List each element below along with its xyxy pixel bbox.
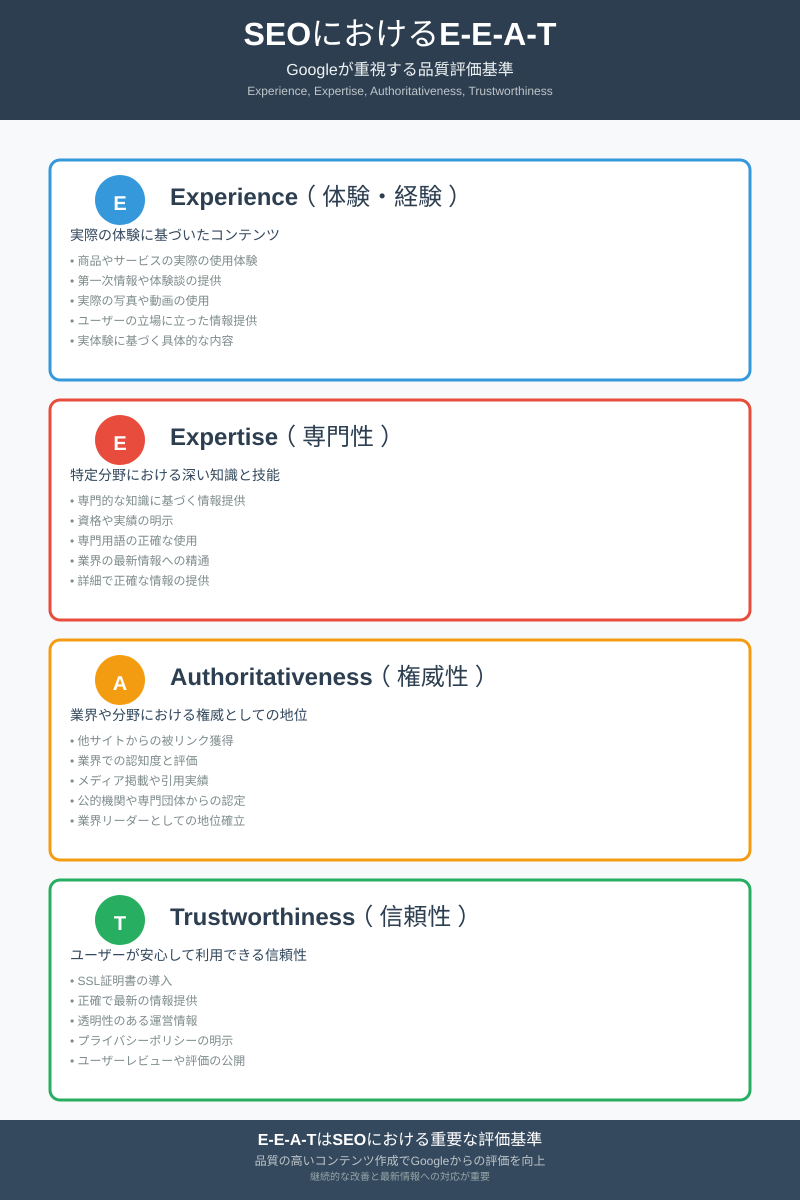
icon: T badge green <box>95 895 145 945</box>
icon: E badge blue: E <box>113 193 127 215</box>
subtitle: Googleが重視する品質評価基準 <box>286 61 514 79</box>
description: Expertise: 特定分野における深い知識と技能 <box>70 467 280 483</box>
panel: Experience <box>50 160 750 380</box>
list: Expertise points: • 専門用語の正確な使用 <box>70 534 198 548</box>
icon: E badge red <box>95 415 145 465</box>
list: Experience points: • 第一次情報や体験談の提供 <box>70 274 222 288</box>
title: SEOにおけるE-E-A-T <box>244 16 557 52</box>
list: Trustworthiness points: • ユーザーレビューや評価の公開 <box>70 1054 245 1068</box>
icon: A badge orange: A <box>113 673 127 695</box>
list: Authoritativeness points: • 他サイトからの被リンク獲得 <box>70 734 234 748</box>
header banner <box>0 0 800 120</box>
list: Authoritativeness points: • 公的機関や専門団体からの認定 <box>70 794 246 808</box>
list: Authoritativeness points <box>70 734 246 828</box>
list: Authoritativeness points: • メディア掲載や引用実績 <box>70 774 209 788</box>
heading: Trustworthiness: Trustworthiness（信頼性） <box>170 904 481 931</box>
list: Expertise points: • 業界の最新情報への精通 <box>70 554 210 568</box>
footer banner <box>0 1120 800 1200</box>
list: Expertise points: • 詳細で正確な情報の提供 <box>70 574 210 588</box>
header tagline: Experience, Expertise, Authoritativeness, Trustworthiness <box>247 84 553 98</box>
list: Experience points: • ユーザーの立場に立った情報提供 <box>70 314 257 328</box>
list: Experience points <box>70 254 258 348</box>
icon: E badge red: E <box>113 433 127 455</box>
list: Expertise points: • 資格や実績の明示 <box>70 514 174 528</box>
list: Authoritativeness points: • 業界での認知度と評価 <box>70 754 198 768</box>
description: Authoritativeness: 業界や分野における権威としての地位 <box>70 707 308 723</box>
list: Experience points: • 商品やサービスの実際の使用体験 <box>70 254 258 268</box>
list: Authoritativeness points: • 業界リーダーとしての地位確立 <box>70 814 245 828</box>
description: Trustworthiness: ユーザーが安心して利用できる信頼性 <box>70 947 307 963</box>
heading: Authoritativeness: Authoritativeness（権威性） <box>170 664 499 691</box>
footer headline: E-E-A-TはSEOにおける重要な評価基準 <box>258 1131 542 1149</box>
list: Experience points: • 実体験に基づく具体的な内容 <box>70 334 234 348</box>
list: Trustworthiness points: • SSL証明書の導入 <box>70 974 172 988</box>
footer note: 継続的な改善と最新情報への対応が重要 <box>310 1171 490 1183</box>
list: Trustworthiness points: • 正確で最新の情報提供 <box>70 994 198 1008</box>
list: Trustworthiness points: • プライバシーポリシーの明示 <box>70 1034 233 1048</box>
panel: Expertise <box>50 400 750 620</box>
heading: Experience: Experience（体験・経験） <box>170 184 472 211</box>
list: Trustworthiness points <box>70 974 245 1068</box>
icon: A badge orange <box>95 655 145 705</box>
list: Expertise points: • 専門的な知識に基づく情報提供 <box>70 494 246 508</box>
heading: Expertise: Expertise（専門性） <box>170 424 404 451</box>
panel: Authoritativeness <box>50 640 750 860</box>
list: Trustworthiness points: • 透明性のある運営情報 <box>70 1014 198 1028</box>
list: Expertise points <box>70 494 246 588</box>
description: Experience: 実際の体験に基づいたコンテンツ <box>70 227 280 243</box>
list: Experience points: • 実際の写真や動画の使用 <box>70 294 210 308</box>
footer message: 品質の高いコンテンツ作成でGoogleからの評価を向上 <box>255 1154 545 1168</box>
icon: T badge green: T <box>114 913 126 935</box>
icon: E badge blue <box>95 175 145 225</box>
panel: Trustworthiness <box>50 880 750 1100</box>
